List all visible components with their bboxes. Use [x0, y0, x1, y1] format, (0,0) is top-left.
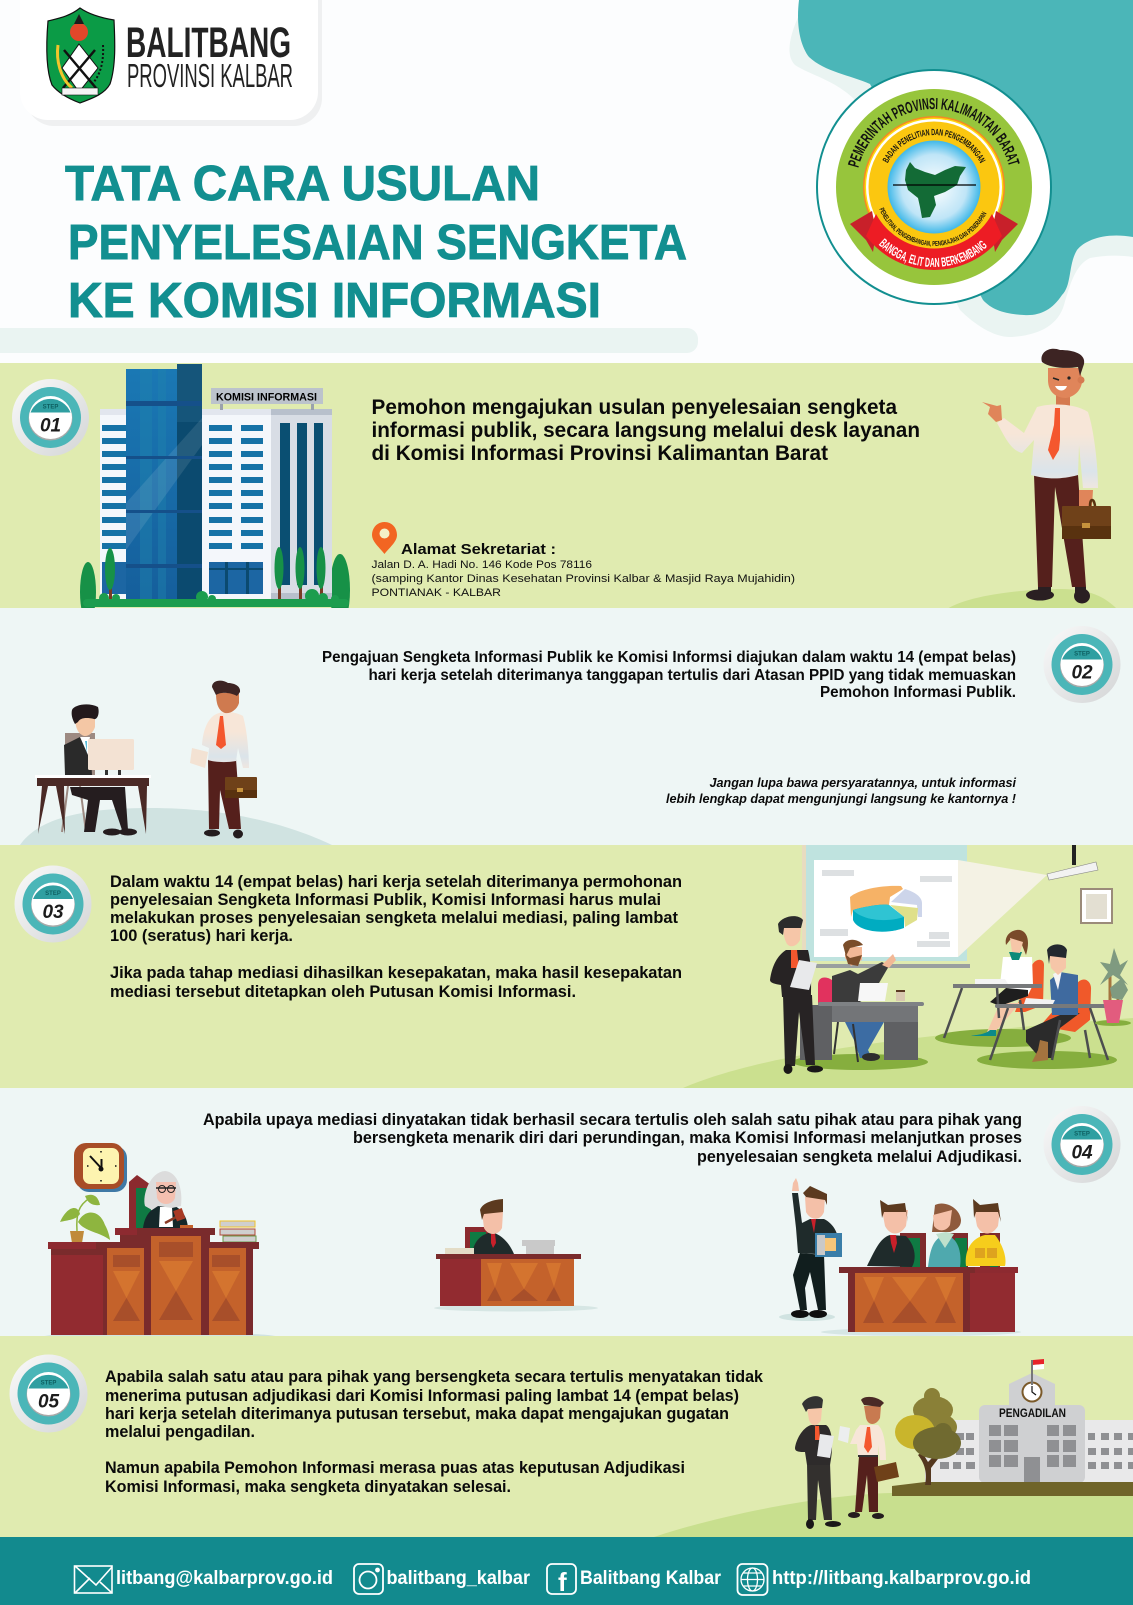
step badge 03 — [14, 866, 92, 942]
step 02 note — [666, 775, 1017, 806]
step badge 02: 02 — [1071, 662, 1093, 684]
step 05 text: menerima putusan adjudikasi dari Komisi Informasi paling lambat 14 (empat belas) — [105, 1387, 739, 1405]
icon: location pin — [372, 522, 397, 554]
seated man — [867, 1200, 926, 1267]
icon: west kalimantan map — [905, 162, 966, 218]
step badge 04: 04 — [1071, 1142, 1093, 1164]
illustration: komisi informasi building — [80, 364, 350, 626]
step badge 04 — [1044, 1106, 1120, 1183]
panel: step 02 — [0, 608, 1133, 845]
step badge 05: 05 — [38, 1392, 59, 1412]
icon: wall clock — [74, 1143, 127, 1192]
seated man with laptop — [800, 940, 924, 1062]
logo card — [20, 0, 322, 126]
illustration: meeting room — [770, 845, 1131, 1074]
address block: (samping Kantor Dinas Kesehatan Provinsi Kalbar & Masjid Raya Mujahidin) — [372, 573, 795, 585]
illustration: clerk at desk — [434, 1199, 598, 1312]
header — [0, 0, 1133, 393]
wall picture — [1080, 888, 1113, 924]
step 02 note: lebih lengkap dapat mengunjungi langsung ke kantornya ! — [666, 791, 1017, 806]
step badge 01: STEP — [43, 404, 58, 410]
title — [65, 157, 687, 328]
men exchanging documents — [795, 1396, 899, 1529]
step 05 text — [105, 1368, 764, 1496]
ribbon: BANGGA, ELIT DAN BERKEMBANG — [878, 238, 986, 267]
sign — [211, 388, 323, 410]
panel: step 03 — [0, 845, 1133, 1088]
illustration: office visit — [20, 681, 332, 845]
central tower — [979, 1359, 1085, 1483]
tree — [895, 1388, 961, 1485]
emblem: pemerintah provinsi: PEMERINTAH PROVINSI KALIMANTAN BARAT — [848, 98, 1020, 168]
clerk — [465, 1199, 514, 1254]
step 01 main text — [372, 396, 920, 465]
step 01 main text: informasi publik, secara langsung melalui desk layanan — [372, 419, 920, 442]
step 05 text: Apabila salah satu atau para pihak yang bersengketa secara tertulis menyatakan tidak — [105, 1368, 764, 1386]
step badge 01 — [12, 379, 89, 456]
panel: step 04 — [0, 1088, 1133, 1342]
step 04 text — [203, 1111, 1022, 1166]
contact: facebook: Balitbang Kalbar — [580, 1568, 722, 1589]
wings — [925, 1420, 1133, 1482]
step 02 main text: Pemohon Informasi Publik. — [820, 684, 1016, 701]
step badge 02 — [1044, 626, 1120, 703]
logo wordmark: PROVINSI KALBAR — [127, 57, 293, 94]
projection screen — [802, 845, 1047, 968]
man in dark suit — [795, 1396, 841, 1529]
icon: plant — [60, 1195, 110, 1243]
title: TATA CARA USULAN — [65, 157, 540, 211]
step badge 01: 01 — [40, 416, 61, 436]
trees — [83, 547, 349, 607]
ground — [892, 1482, 1133, 1496]
step badge 05: STEP — [41, 1380, 56, 1386]
projector — [1047, 845, 1098, 880]
title: PENYELESAIAN SENGKETA — [68, 216, 687, 270]
illustration: parties at bench — [779, 1178, 1021, 1336]
step 03 text: Jika pada tahap mediasi dihasilkan kesepakatan, maka hasil kesepakatan — [110, 964, 682, 982]
contact: email — [74, 1566, 333, 1593]
contact: facebook — [547, 1564, 722, 1597]
standing man with folder — [190, 681, 257, 838]
step badge 04: STEP — [1074, 1132, 1090, 1138]
emblem: pemerintah provinsi — [816, 69, 1052, 305]
illustration: pointing man with briefcase — [947, 349, 1117, 609]
contact: email: litbang@kalbarprov.go.id — [116, 1568, 333, 1589]
step 02 main text — [322, 649, 1016, 701]
step 03 text: mediasi tersebut ditetapkan oleh Putusan Komisi Informasi. — [110, 983, 576, 1001]
floor shadows — [792, 1029, 1117, 1070]
sign: KOMISI INFORMASI — [216, 392, 317, 404]
bench — [839, 1267, 1018, 1332]
step 01 main text: Pemohon mengajukan usulan penyelesaian sengketa — [372, 396, 897, 419]
step badge 02: STEP — [1074, 652, 1090, 658]
step 03 text — [110, 873, 682, 1001]
pie chart — [820, 870, 952, 947]
step 05 text: melalui pengadilan. — [105, 1423, 255, 1441]
step 02 main text: Pengajuan Sengketa Informasi Publik ke Komisi Informsi diajukan dalam waktu 14 (empat belas) — [322, 649, 1016, 666]
step badge 05 — [10, 1354, 88, 1432]
step 03 text: melakukan proses penyelesaian sengketa melalui mediasi, paling lambat — [110, 909, 679, 927]
contact: website — [738, 1564, 1031, 1595]
step 01 main text: di Komisi Informasi Provinsi Kalimantan Barat — [372, 442, 828, 465]
step 03 text: Dalam waktu 14 (empat belas) hari kerja setelah diterimanya permohonan — [110, 873, 682, 891]
illustration: courthouse — [892, 1359, 1133, 1496]
desk worker — [35, 704, 151, 836]
address block: PONTIANAK - KALBAR — [372, 587, 501, 599]
step 04 text: penyelesaian sengketa melalui Adjudikasi. — [697, 1148, 1022, 1166]
panel: step 05 — [0, 1336, 1133, 1537]
seated woman — [928, 1203, 968, 1267]
step 04 text: bersengketa menarik diri dari perundingan, maka Komisi Informasi melanjutkan proses — [353, 1129, 1022, 1147]
emblem: pemerintah provinsi: BADAN PENELITIAN DAN PENGEMBANGAN — [882, 128, 986, 164]
desk — [436, 1240, 581, 1306]
step badge 03: 03 — [42, 902, 64, 923]
presenter with paper — [770, 916, 823, 1074]
ribbon — [850, 211, 1018, 270]
panel: step 01 — [0, 349, 1133, 626]
icon: provincial shield — [47, 8, 115, 103]
man in blue jacket — [990, 944, 1108, 1062]
title: KE KOMISI INFORMASI — [68, 274, 601, 328]
logo wordmark: BALITBANG — [126, 19, 291, 67]
potted plant — [1095, 948, 1131, 1026]
standing speaker — [791, 1178, 842, 1318]
judge — [129, 1171, 193, 1229]
contact: instagram: balitbang_kalbar — [386, 1568, 531, 1589]
decorative blobs — [789, 0, 1133, 337]
contact: facebook: f — [558, 1567, 567, 1597]
man in white shirt — [838, 1397, 899, 1519]
logo wordmark — [126, 19, 293, 94]
address block — [372, 542, 795, 599]
address block: Jalan D. A. Hadi No. 146 Kode Pos 78116 — [372, 559, 592, 571]
contact: website: http://litbang.kalbarprov.go.id — [772, 1568, 1031, 1589]
central tower: PENGADILAN — [999, 1408, 1066, 1420]
illustration: judge at bench — [42, 1143, 278, 1342]
footer — [0, 1537, 1133, 1605]
icon: stacked books — [220, 1221, 256, 1242]
bench — [48, 1228, 259, 1335]
step badge 03: STEP — [45, 891, 61, 897]
step 02 main text: hari kerja setelah diterimanya tanggapan tertulis dari Atasan PPID yang tidak memuaskan — [368, 667, 1016, 684]
step 05 text: Komisi Informasi, maka sengketa dinyatakan selesai. — [105, 1478, 511, 1496]
step 03 text: 100 (seratus) hari kerja. — [110, 927, 293, 945]
contact: instagram — [354, 1564, 531, 1594]
emblem: pemerintah provinsi: PENELITIAN, PENGEMBANGAN, PENGKAJIAN DAN PENERAPAN — [879, 207, 986, 247]
address block: Alamat Sekretariat : — [401, 542, 556, 558]
step 02 note: Jangan lupa bawa persyaratannya, untuk informasi — [710, 775, 1016, 790]
step 03 text: penyelesaian Sengketa Informasi Publik, Komisi Informasi harus mulai — [110, 891, 661, 909]
step 05 text: hari kerja setelah diterimanya putusan tersebut, maka dapat mengajukan gugatan — [105, 1405, 729, 1423]
woman at table — [944, 930, 1044, 1038]
title underline bar — [0, 328, 698, 353]
step 04 text: Apabila upaya mediasi dinyatakan tidak berhasil secara tertulis oleh salah satu pihak atau para pihak yang — [203, 1111, 1022, 1129]
seated man in yellow — [966, 1199, 1006, 1267]
step 05 text: Namun apabila Pemohon Informasi merasa puas atas keputusan Adjudikasi — [105, 1459, 685, 1477]
